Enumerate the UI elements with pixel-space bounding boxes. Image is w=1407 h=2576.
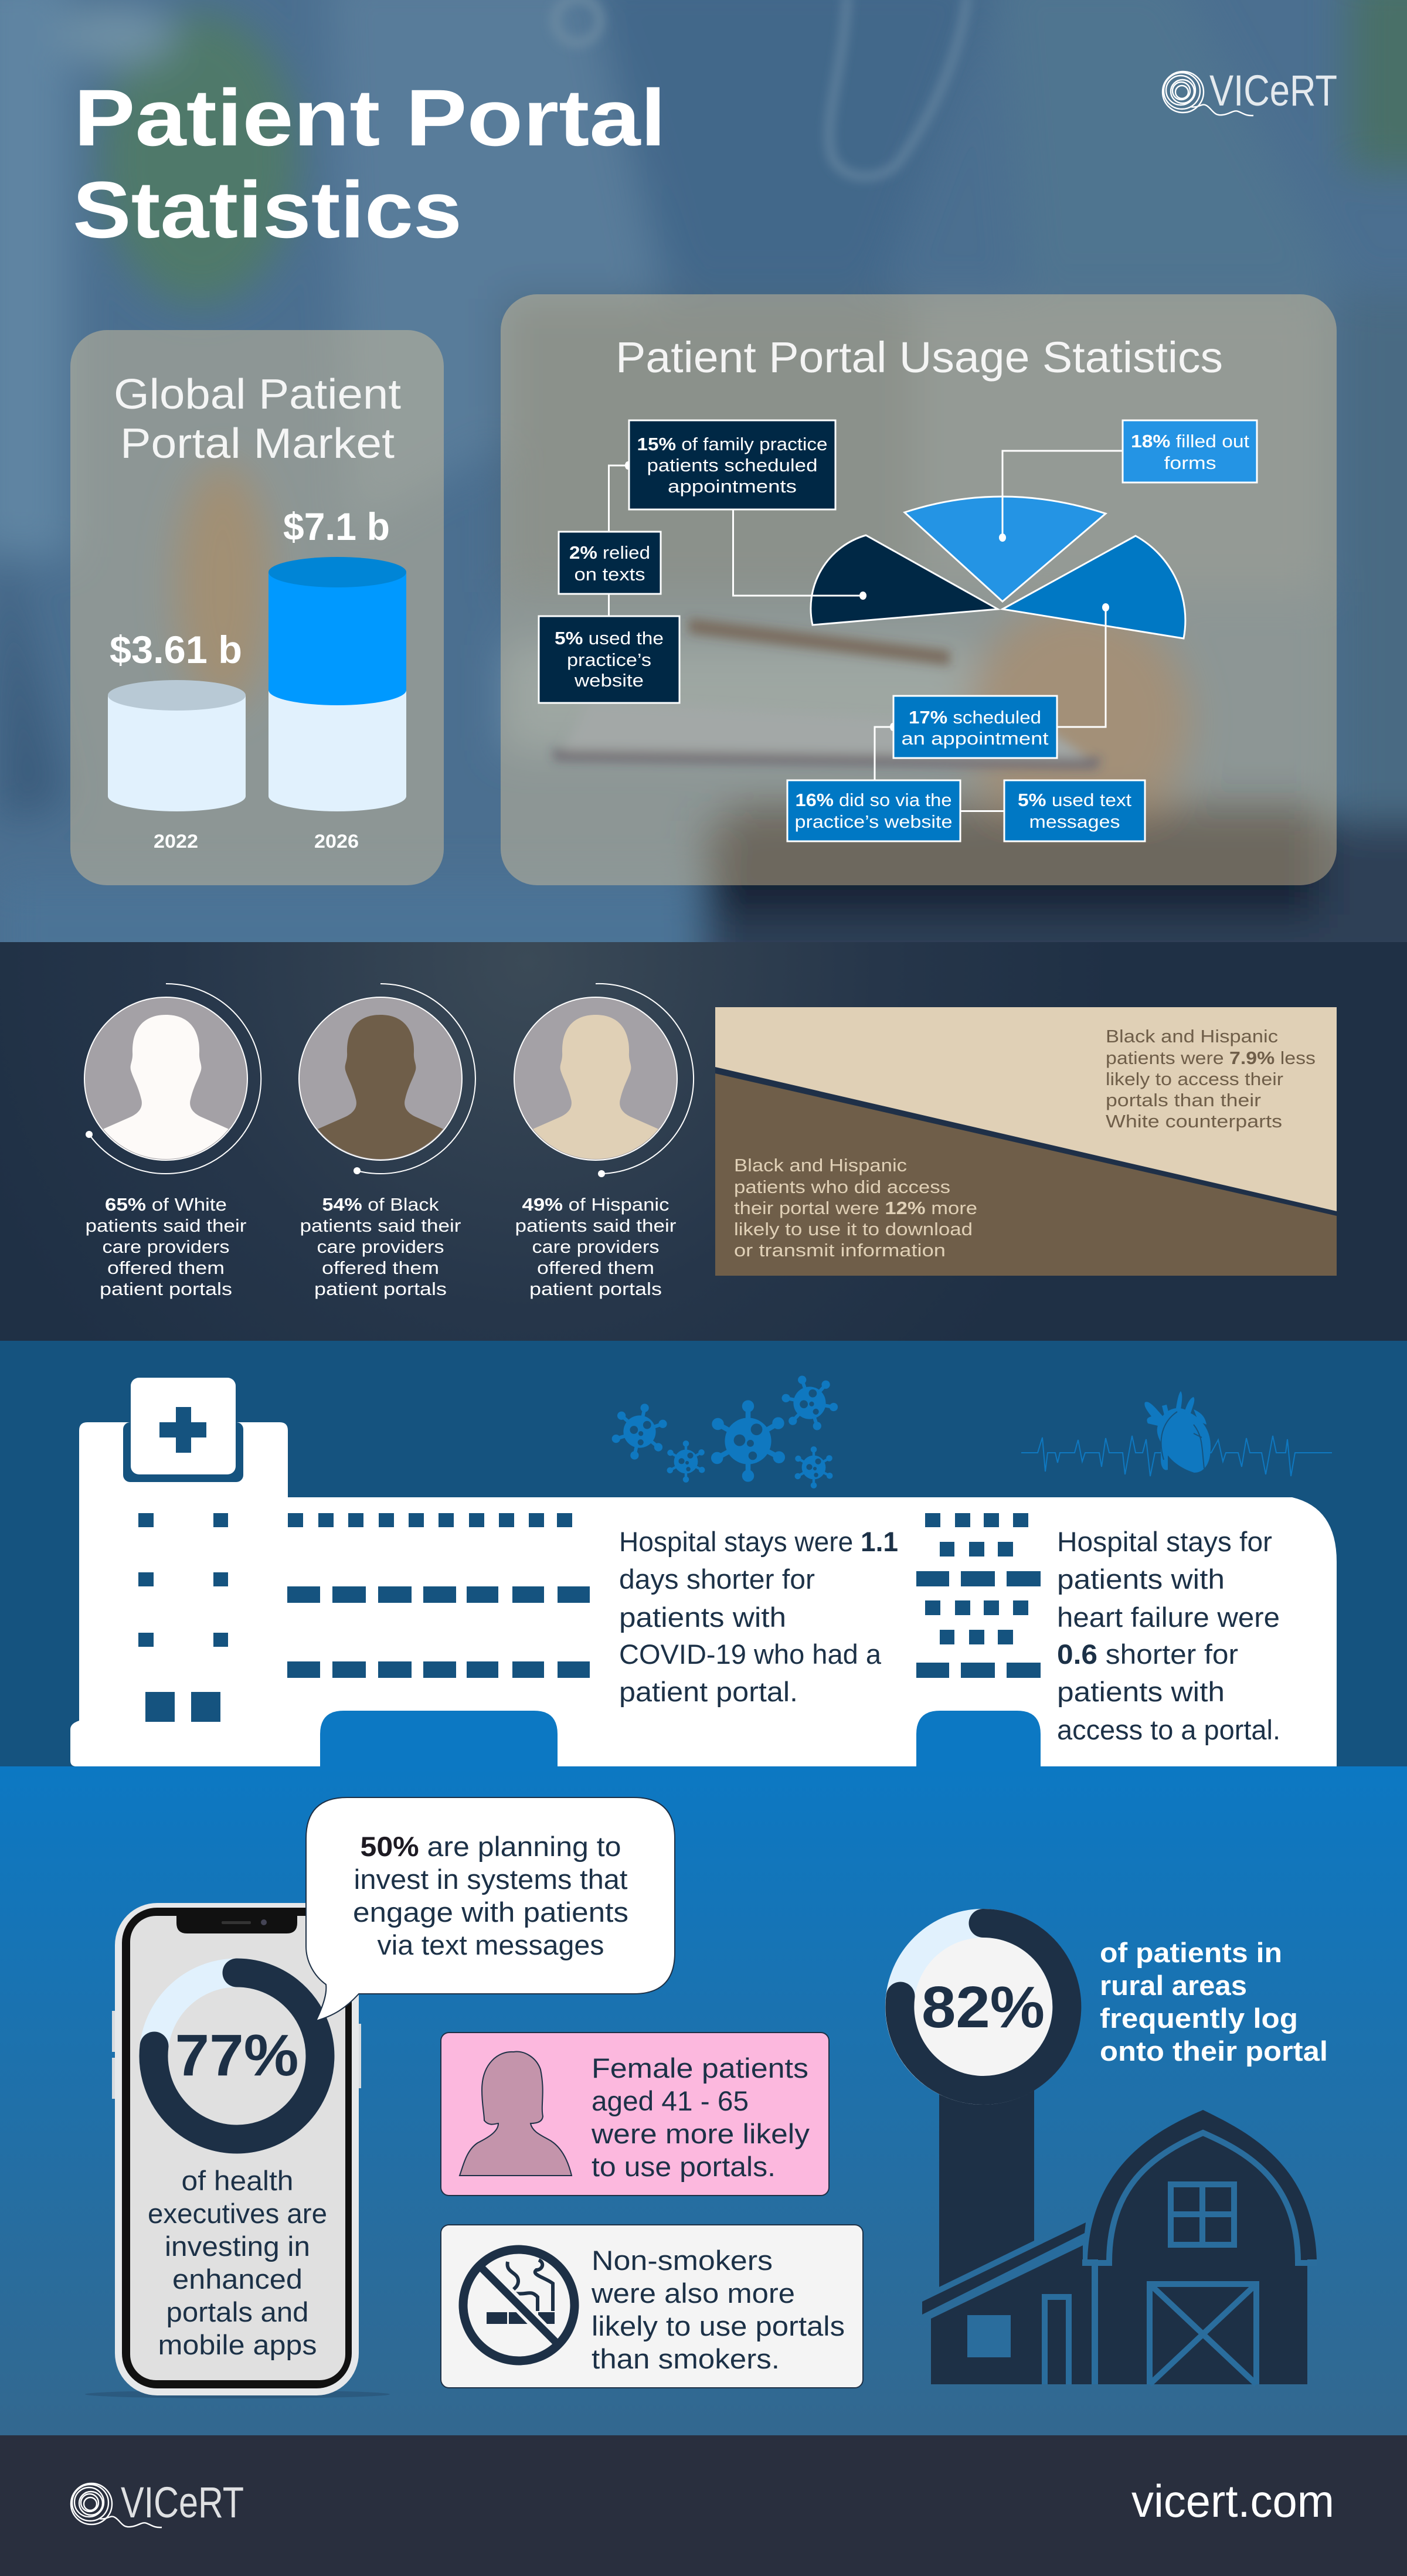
pie sector: dark xyxy=(811,535,998,625)
heading: usage: Patient Portal Usage Statistics xyxy=(616,333,1223,382)
text: 49%: care providers xyxy=(532,1236,659,1257)
avatar: black patients xyxy=(299,984,475,1174)
logo: Vicert top xyxy=(1163,66,1337,115)
text: heart failure stays: access to a portal. xyxy=(1057,1714,1280,1745)
pie sector: blue xyxy=(1002,536,1185,638)
card: female patients xyxy=(441,2033,829,2196)
door right xyxy=(916,1711,1041,1769)
speech bubble xyxy=(306,1797,675,2021)
icon: woman xyxy=(460,2052,572,2176)
box: 5% used the website: 5% used the xyxy=(555,628,664,648)
box: 15% family practice xyxy=(629,420,835,509)
text: rural patients xyxy=(1100,1937,1328,2067)
connector lines xyxy=(609,451,1123,811)
text: female: aged 41 - 65 xyxy=(592,2085,749,2116)
box: 17% scheduled: 17% scheduled xyxy=(909,707,1041,728)
text: 49%: offered them xyxy=(537,1258,654,1278)
text: heart failure stays: patients with xyxy=(1057,1564,1225,1595)
text: 50% planning: engage with patients xyxy=(353,1897,628,1928)
text: 7.9% less likely: portals than their xyxy=(1106,1090,1261,1110)
text: 12% more likely: their portal were 12% more xyxy=(734,1198,977,1218)
barn door xyxy=(1150,2284,1256,2384)
box: 17% scheduled xyxy=(893,696,1057,758)
text: 50% planning xyxy=(353,1831,628,1960)
text: 65% xyxy=(86,1194,246,1299)
panel: global patient portal market xyxy=(70,330,444,885)
text: 65%: offered them xyxy=(107,1258,225,1278)
text: 65%: patient portals xyxy=(100,1279,232,1299)
box: 5% used the website xyxy=(539,616,679,703)
website: vicert.com xyxy=(1131,2475,1334,2527)
box: 16% website xyxy=(787,780,960,841)
text: 65%: 65% of White xyxy=(105,1194,227,1215)
value: 2026: $7.1 b xyxy=(283,505,390,548)
text: 65%: care providers xyxy=(102,1236,230,1257)
year 2026: 2026 xyxy=(314,831,359,852)
title: Statistics xyxy=(73,165,462,255)
background photo: doctor with clipboard xyxy=(0,0,1407,985)
text: COVID-19 stays xyxy=(619,1526,898,1707)
box: 5% text messages xyxy=(1004,780,1145,841)
barn window xyxy=(1171,2184,1234,2245)
text: health executives: mobile apps xyxy=(158,2329,317,2360)
text: female: to use portals. xyxy=(592,2151,776,2182)
text: smokers: Non-smokers xyxy=(592,2245,773,2276)
text: 50% planning: 50% are planning to xyxy=(360,1831,621,1862)
card: non-smokers xyxy=(441,2225,863,2388)
text: 7.9% less likely: patients were 7.9% less xyxy=(1106,1048,1316,1068)
panel: diagonal comparison xyxy=(715,1007,1337,1276)
text: 54%: patients said their xyxy=(300,1215,461,1236)
shed roof xyxy=(922,2222,1086,2315)
icon: heartbeat line xyxy=(1021,1436,1332,1476)
text: 54%: offered them xyxy=(322,1258,439,1278)
box: 15% family practice: 15% of family practice xyxy=(637,434,828,454)
text: heart failure stays: heart failure were xyxy=(1057,1602,1280,1633)
text: 49%: patient portals xyxy=(529,1279,662,1299)
text: 49%: patients said their xyxy=(515,1215,677,1236)
text: health executives: portals and xyxy=(166,2296,308,2327)
text: smokers: likely to use portals xyxy=(592,2310,845,2341)
value: 77%: 77% xyxy=(175,2023,299,2088)
logo: Vicert footer: VICeRT xyxy=(121,2478,244,2527)
text: 12% more likely xyxy=(734,1155,977,1260)
barn and silo xyxy=(899,1923,1317,2384)
shed window xyxy=(967,2315,1011,2357)
text: health executives xyxy=(148,2165,327,2360)
box: 5% used the website: website xyxy=(574,670,644,691)
text: COVID-19 stays: COVID-19 who had a xyxy=(619,1639,882,1670)
box: 2% relied on texts: on texts xyxy=(575,564,645,584)
text: smokers xyxy=(591,2245,845,2374)
text: heart failure stays xyxy=(1057,1526,1280,1745)
text: 54%: care providers xyxy=(317,1236,444,1257)
box: 17% scheduled: an appointment xyxy=(902,728,1049,749)
text: 50% planning: via text messages xyxy=(378,1929,604,1960)
box: 16% website: 16% did so via the xyxy=(795,790,952,810)
footer xyxy=(0,2435,1407,2576)
text: health executives: executives are xyxy=(148,2198,327,2229)
section: hospital xyxy=(0,1341,1407,1769)
text: 12% more likely: patients who did access xyxy=(734,1177,950,1197)
hospital building xyxy=(70,1378,1337,1769)
text: rural patients: rural areas xyxy=(1100,1970,1247,2001)
panel: usage statistics xyxy=(501,294,1337,885)
ring: 82% xyxy=(899,1923,1067,2091)
box: 5% used the website: practice’s xyxy=(567,650,651,670)
text: 12% more likely: likely to use it to download xyxy=(734,1219,973,1239)
text: 65%: patients said their xyxy=(86,1215,246,1236)
box: 15% family practice: appointments xyxy=(668,476,797,497)
text: COVID-19 stays: Hospital stays were 1.1 xyxy=(619,1526,898,1557)
cylinder 2022 xyxy=(108,680,246,811)
door left xyxy=(320,1711,558,1769)
shed xyxy=(931,2245,1092,2384)
silo xyxy=(939,2087,1034,2287)
box: 18% filled out forms: 18% filled out xyxy=(1131,431,1249,451)
text: health executives: investing in xyxy=(165,2231,310,2262)
year 2022: 2022 xyxy=(154,831,198,852)
text: heart failure stays: patients with xyxy=(1057,1676,1225,1707)
text: 54%: 54% of Black xyxy=(322,1194,439,1215)
text: COVID-19 stays: patient portal. xyxy=(619,1676,798,1707)
heading: market xyxy=(114,371,401,467)
text: 7.9% less likely: Black and Hispanic xyxy=(1106,1026,1278,1046)
barn roof xyxy=(1087,2110,1317,2259)
text: 49% xyxy=(515,1194,677,1299)
text: rural patients: onto their portal xyxy=(1100,2035,1328,2067)
text: 12% more likely: Black and Hispanic xyxy=(734,1155,907,1175)
pie sector: light blue xyxy=(905,497,1106,601)
box: 5% text messages: 5% used text xyxy=(1018,790,1131,810)
text: smokers: than smokers. xyxy=(592,2343,780,2374)
text: female xyxy=(591,2052,810,2182)
text: 54%: patient portals xyxy=(314,1279,447,1299)
text: health executives: enhanced xyxy=(172,2264,303,2295)
text: 50% planning: invest in systems that xyxy=(354,1864,627,1895)
value: 2022: $3.61 b xyxy=(110,628,242,671)
shed door xyxy=(1045,2297,1069,2384)
text: 49%: 49% of Hispanic xyxy=(522,1194,669,1215)
avatar: hispanic patients xyxy=(514,984,694,1177)
heading: market: Global Patient xyxy=(114,371,401,418)
section: demographics xyxy=(0,942,1407,1341)
box: 16% website: practice’s website xyxy=(795,811,952,832)
icon: medical cross xyxy=(159,1407,206,1453)
icon: heart xyxy=(1144,1391,1211,1473)
box: 15% family practice: patients scheduled xyxy=(647,455,817,475)
text: 54% xyxy=(300,1194,461,1299)
box: 18% filled out forms: forms xyxy=(1164,453,1216,473)
phone xyxy=(85,1903,390,2398)
box: 5% text messages: messages xyxy=(1029,811,1120,832)
text: heart failure stays: 0.6 shorter for xyxy=(1057,1639,1238,1670)
text: 12% more likely: or transmit information xyxy=(734,1240,946,1260)
avatar: white patients xyxy=(84,984,261,1174)
icon: viruses xyxy=(610,1370,841,1487)
text: COVID-19 stays: patients with xyxy=(619,1602,786,1633)
section: mobile and rural xyxy=(0,1766,1407,2435)
windows xyxy=(138,1513,1041,1722)
text: 7.9% less likely: White counterparts xyxy=(1106,1111,1282,1131)
icon: no smoking xyxy=(463,2249,575,2361)
text: female: were more likely xyxy=(591,2118,810,2149)
box: 18% filled out forms xyxy=(1123,420,1257,482)
box: 2% relied on texts xyxy=(559,532,661,594)
cylinder 2026 xyxy=(269,557,406,811)
value: 82%: 82% xyxy=(922,1975,1045,2040)
ring: 77% xyxy=(154,1973,320,2139)
text: 7.9% less likely: likely to access their xyxy=(1106,1069,1283,1089)
title: Patient Portal xyxy=(74,73,666,163)
text: COVID-19 stays: days shorter for xyxy=(619,1564,815,1595)
text: health executives: of health xyxy=(182,2165,293,2196)
text: smokers: were also more xyxy=(591,2278,795,2309)
text: rural patients: frequently log xyxy=(1100,2003,1298,2034)
text: 7.9% less likely xyxy=(1106,1026,1316,1131)
text: rural patients: of patients in xyxy=(1100,1937,1282,1968)
text: heart failure stays: Hospital stays for xyxy=(1057,1526,1272,1557)
logo: Vicert footer xyxy=(71,2478,244,2527)
heading: market: Portal Market xyxy=(120,420,395,467)
text: female: Female patients xyxy=(592,2052,808,2084)
title xyxy=(73,73,666,255)
box: 2% relied on texts: 2% relied xyxy=(569,542,650,563)
logo: Vicert top: VICeRT xyxy=(1209,66,1337,115)
